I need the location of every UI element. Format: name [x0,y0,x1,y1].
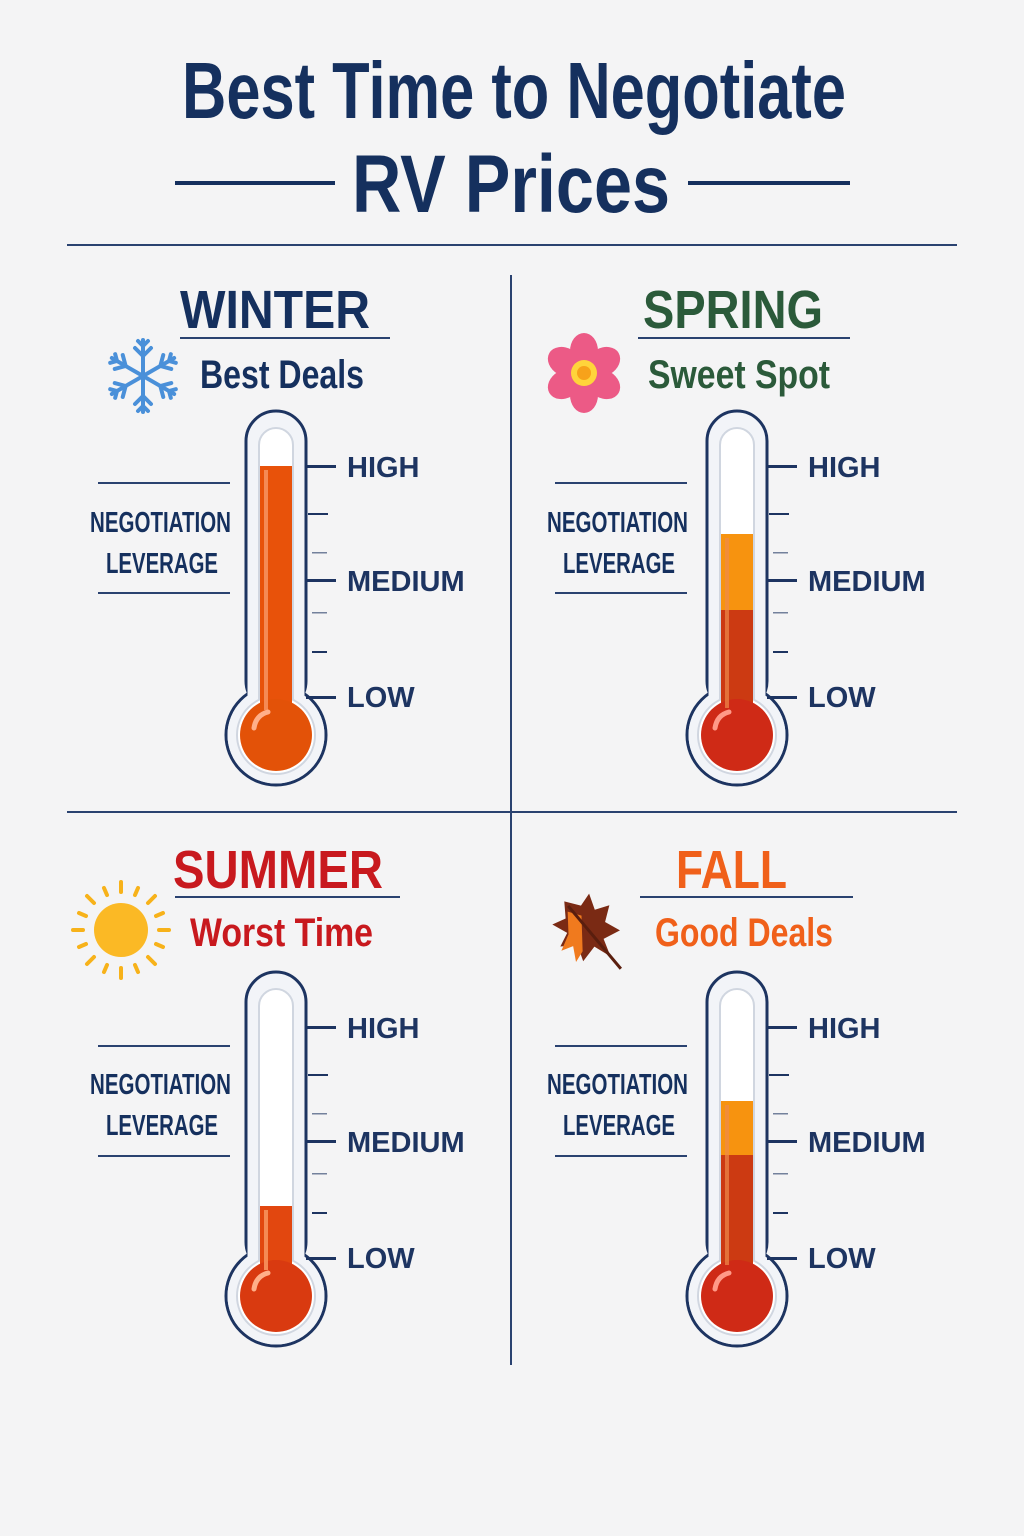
subtitle: fall: Good Deals [655,911,833,955]
icon: flower [542,333,626,413]
scale: MEDIUM [808,566,926,598]
scale [306,452,465,714]
scale: HIGH [347,1013,420,1045]
thermometer: fall [687,972,926,1346]
scale: MEDIUM [347,1127,465,1159]
scale: HIGH [808,1013,880,1045]
label: leverage [547,1045,688,1157]
panel: summer [73,840,465,1346]
scale [767,452,926,714]
subtitle: winter: Best Deals [200,353,364,397]
heading: spring: SPRING [643,280,823,340]
heading: fall: FALL [676,840,787,900]
heading: winter: WINTER [180,280,370,340]
label: leverage: LEVERAGE [106,548,218,580]
scale: HIGH [808,452,880,484]
thermometer: spring [687,411,926,785]
panel: winter [90,280,465,785]
panel: spring [542,280,926,785]
scale: LOW [347,1243,415,1275]
label: leverage: NEGOTIATION [90,507,231,539]
icon: leaf [538,881,645,991]
title: RV Prices [352,139,670,230]
label: leverage [90,482,231,594]
panel: fall [538,840,926,1346]
label: leverage [547,482,688,594]
subtitle: summer: Worst Time [190,911,373,955]
icon: sun [73,882,169,978]
heading: summer: SUMMER [173,840,383,900]
title: Best Time to Negotiate [182,46,846,135]
label: leverage: LEVERAGE [563,1110,675,1142]
label: leverage: NEGOTIATION [547,507,688,539]
scale: LOW [347,682,415,714]
scale [306,1013,465,1275]
icon: snowflake [108,340,178,412]
label: leverage: NEGOTIATION [547,1069,688,1101]
scale: LOW [808,1243,876,1275]
label: leverage [90,1045,231,1157]
subtitle: spring: Sweet Spot [648,353,830,397]
scale: HIGH [347,452,420,484]
scale [767,1013,926,1275]
thermometer: summer [226,972,465,1346]
scale: MEDIUM [347,566,465,598]
label: leverage: LEVERAGE [563,548,675,580]
scale: MEDIUM [808,1127,926,1159]
thermometer: winter [226,411,465,785]
label: leverage: LEVERAGE [106,1110,218,1142]
scale: LOW [808,682,876,714]
title [175,46,850,230]
label: leverage: NEGOTIATION [90,1069,231,1101]
